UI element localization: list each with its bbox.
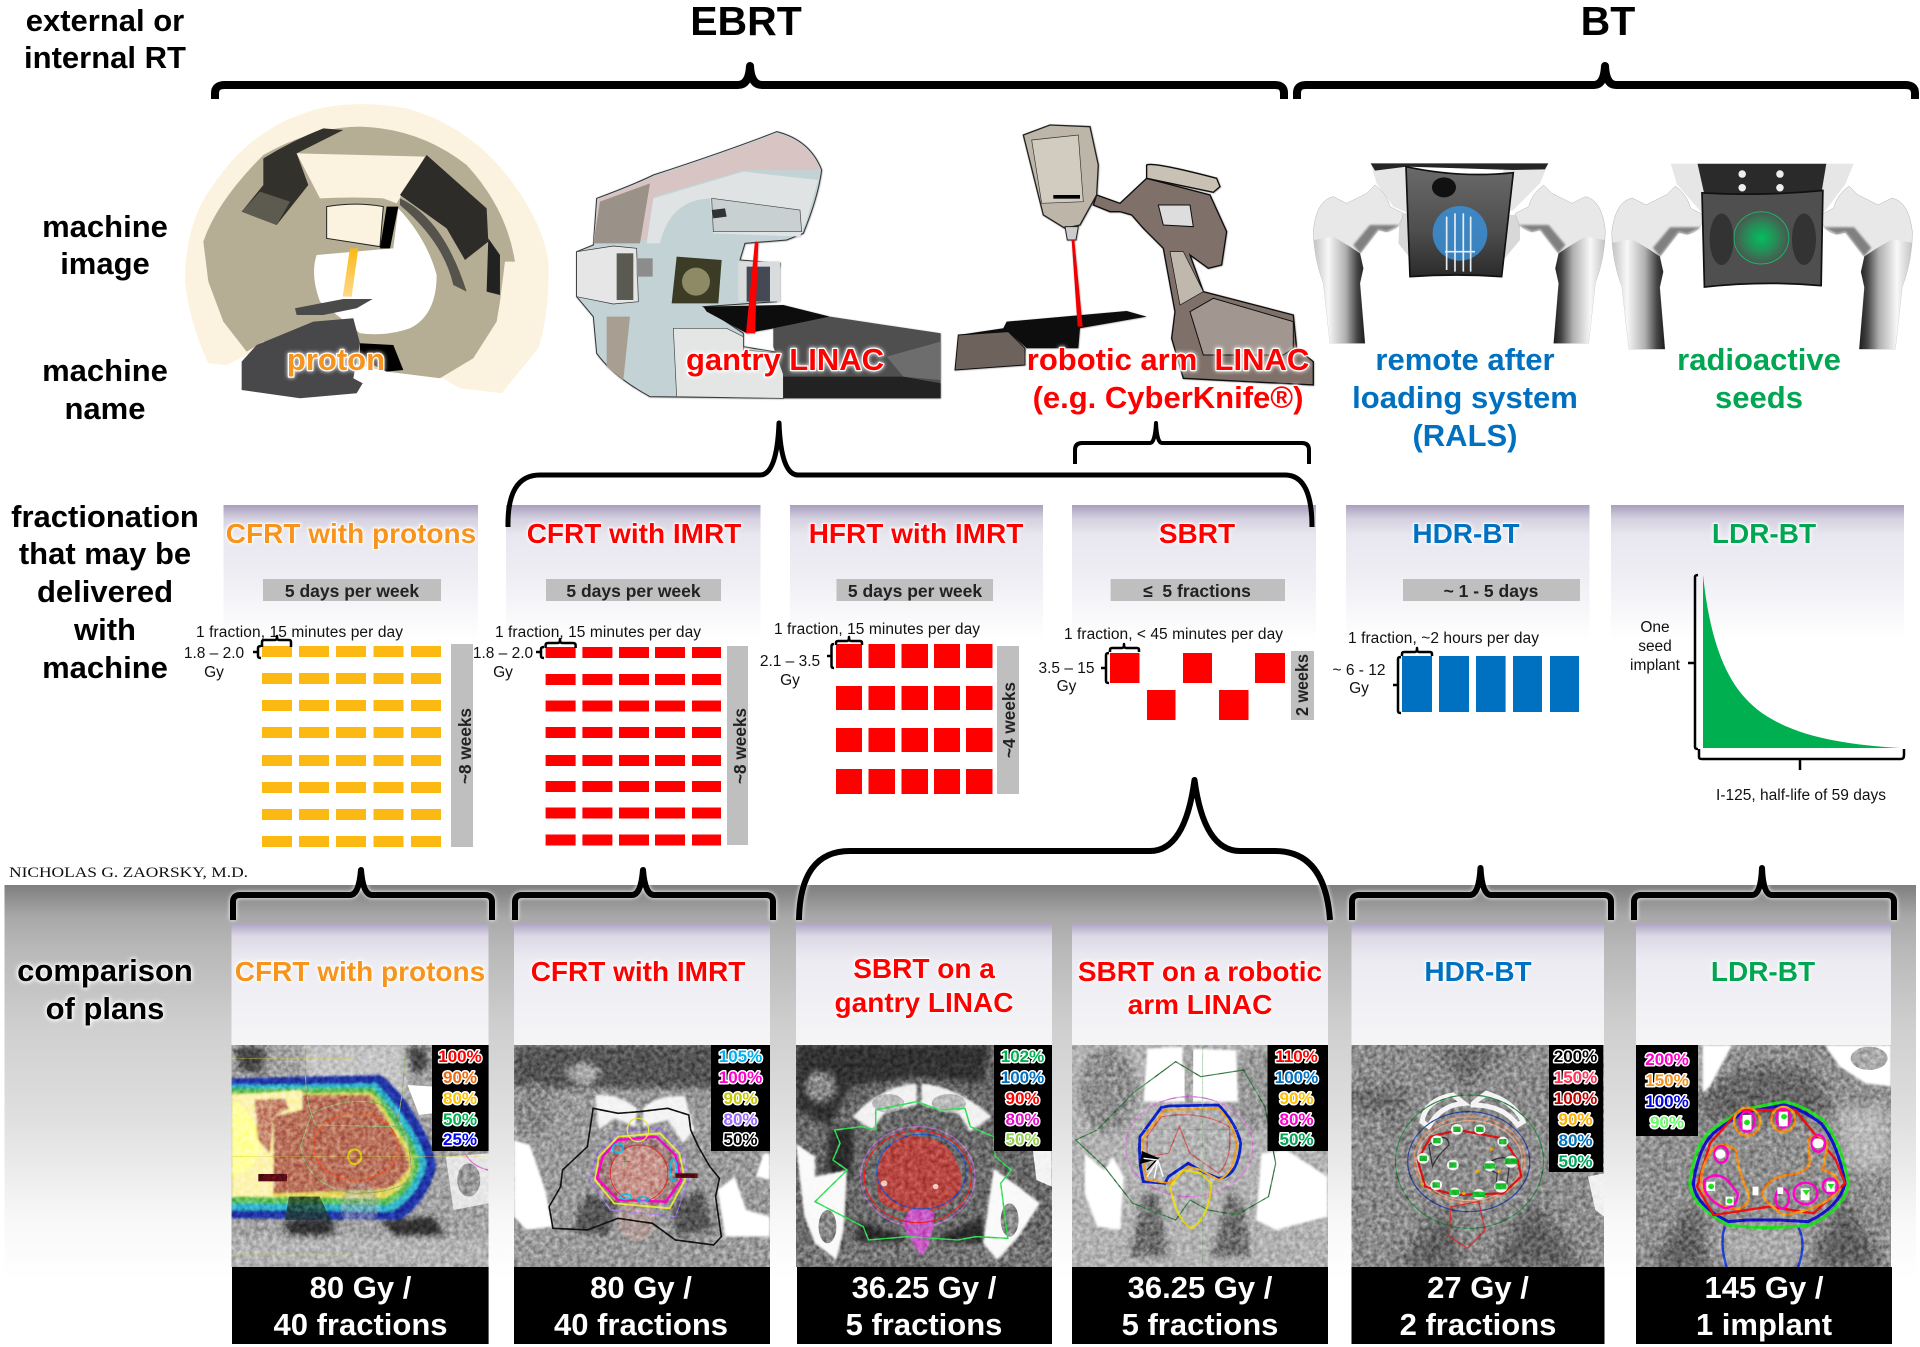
duration label: ~8 weeks <box>730 708 750 784</box>
duration label: ~4 weeks <box>999 682 1019 758</box>
dose legend: 105% <box>719 1047 762 1066</box>
panel title: SBRT <box>1159 518 1235 549</box>
duration label: ~8 weeks <box>455 708 475 784</box>
dose legend: 100% <box>1275 1068 1318 1087</box>
plan title: arm LINAC <box>1128 989 1272 1020</box>
CT dose image <box>1072 1045 1329 1268</box>
plan panel: CFRT with protons <box>231 924 492 1344</box>
dose legend: 80% <box>443 1089 477 1108</box>
row label: machine image: machine <box>42 209 168 244</box>
schedule label: 5 days per week <box>285 581 419 601</box>
plan title: CFRT with protons <box>235 956 485 987</box>
dose legend: 100% <box>719 1068 762 1087</box>
bracket: CFRT IMRT plan <box>515 870 773 920</box>
prescription: 40 fractions <box>273 1307 448 1342</box>
panel title: CFRT with protons <box>226 518 476 549</box>
prescription: 2 fractions <box>1400 1307 1556 1342</box>
plan title: CFRT with IMRT <box>531 956 745 987</box>
row label: fractionation that may be delivered with machine: that may be <box>19 536 191 571</box>
CT dose image <box>514 1045 774 1268</box>
schedule label: ≤ 5 fractions <box>1143 581 1251 601</box>
schedule label: ~ 1 - 5 days <box>1444 581 1539 601</box>
dose label: Gy <box>1057 678 1077 695</box>
panel title: LDR-BT <box>1712 518 1816 549</box>
row label: external or internal RT: internal RT <box>24 40 186 75</box>
bracket: LDR-BT plan <box>1634 868 1894 920</box>
panel: SBRT fractionation <box>1038 505 1316 720</box>
dose label: Gy <box>1349 680 1369 697</box>
fraction note: 1 fraction, 15 minutes per day <box>196 624 403 641</box>
row label: comparison of plans: of plans <box>46 991 164 1026</box>
row label: fractionation that may be delivered with machine: delivered <box>37 574 173 609</box>
plan panel: SBRT on a gantry LINAC <box>796 924 1053 1344</box>
prescription: 80 Gy / <box>590 1270 692 1305</box>
dose legend: 110% <box>1275 1047 1318 1066</box>
prescription: 27 Gy / <box>1427 1270 1529 1305</box>
dose legend: 200% <box>1645 1050 1689 1069</box>
plan panel: LDR-BT <box>1636 924 1895 1344</box>
label: one seed implant: implant <box>1630 657 1681 674</box>
machine name: robotic arm LINAC: (e.g. CyberKnife®) <box>1033 380 1303 415</box>
CT dose image <box>1351 1045 1606 1268</box>
dose legend: 90% <box>723 1089 758 1108</box>
plan panel: HDR-BT <box>1351 924 1606 1344</box>
row label: fractionation that may be delivered with machine: fractionation <box>11 499 199 534</box>
bracket: EBRT <box>215 66 1284 99</box>
dose label: 3.5 – 15 <box>1038 660 1095 677</box>
dose legend <box>1268 1045 1328 1151</box>
CT dose image <box>796 1045 1053 1268</box>
author credit: NICHOLAS G. ZAORSKY, M.D. <box>9 865 248 881</box>
dose legend: 100% <box>1554 1089 1597 1108</box>
dose legend: 90% <box>443 1068 477 1087</box>
prescription: 5 fractions <box>846 1307 1002 1342</box>
prescription: 80 Gy / <box>310 1270 412 1305</box>
dose label: Gy <box>204 664 224 681</box>
plan panel: SBRT on a robotic arm LINAC <box>1072 924 1329 1344</box>
plan title: LDR-BT <box>1711 956 1815 987</box>
duration label: 2 weeks <box>1292 654 1312 716</box>
image: radioactive seeds pelvis <box>1612 164 1912 349</box>
prescription: 36.25 Gy / <box>852 1270 997 1305</box>
label: one seed implant: seed <box>1638 638 1672 655</box>
dose legend: 90% <box>1558 1110 1593 1129</box>
bracket: CFRT protons plan <box>233 870 492 920</box>
row label: fractionation that may be delivered with machine: with <box>73 612 136 647</box>
bracket: HDR-BT plan <box>1352 868 1611 920</box>
row label: comparison of plans: comparison <box>17 953 193 988</box>
CT dose image <box>1636 1045 1895 1268</box>
label: one seed implant: One <box>1640 619 1670 636</box>
image: robotic arm LINAC <box>955 125 1313 385</box>
dose legend: 150% <box>1645 1071 1689 1090</box>
panel: HDR-BT fractionation <box>1332 505 1590 713</box>
dose label: ~ 6 - 12 <box>1332 662 1386 679</box>
fraction grid <box>1110 653 1285 720</box>
panel: CFRT with protons fractionation <box>184 505 478 847</box>
image: proton gantry <box>185 104 549 398</box>
row label: machine name: machine <box>42 353 168 388</box>
fraction note: 1 fraction, 15 minutes per day <box>495 624 701 641</box>
dose legend: 80% <box>1558 1131 1593 1150</box>
panel: HFRT with IMRT fractionation <box>760 505 1043 794</box>
panel: CFRT with IMRT fractionation <box>473 505 760 846</box>
image: remote afterloading pelvis <box>1313 163 1605 343</box>
prescription: 40 fractions <box>554 1307 728 1342</box>
dose legend: 50% <box>1005 1130 1040 1149</box>
fraction grid <box>262 646 441 847</box>
machine name: robotic arm LINAC: robotic arm LINAC <box>1027 342 1309 377</box>
row label: external or internal RT: external or <box>26 3 184 38</box>
dose legend: 50% <box>1558 1152 1593 1171</box>
dose legend: 25% <box>443 1130 477 1149</box>
plan title: gantry LINAC <box>835 987 1013 1018</box>
dose legend: 200% <box>1554 1047 1597 1066</box>
label: half-life: I-125, half-life of 59 days <box>1716 787 1886 804</box>
row label: fractionation that may be delivered with machine: machine <box>42 650 168 685</box>
machine name: remote after loading system: remote after <box>1375 342 1555 377</box>
plan title: HDR-BT <box>1424 956 1532 987</box>
machine name: remote after loading system: loading system <box>1352 380 1578 415</box>
bracket: BT <box>1297 66 1915 99</box>
plan title: SBRT on a robotic <box>1078 956 1322 987</box>
image: gantry LINAC <box>577 132 941 398</box>
bracket: robotic LINAC fractionation <box>1075 423 1309 464</box>
panel: LDR-BT fractionation <box>1611 505 1904 804</box>
dose label: Gy <box>780 672 800 689</box>
machine name: radioactive seeds: radioactive <box>1677 342 1841 377</box>
dose legend: 90% <box>1279 1089 1314 1108</box>
fraction note: 1 fraction, < 45 minutes per day <box>1064 626 1283 643</box>
schedule label: 5 days per week <box>848 581 982 601</box>
dose legend <box>1636 1045 1698 1136</box>
dose label: Gy <box>493 664 513 681</box>
dose label: 1.8 – 2.0 <box>473 645 534 662</box>
fraction note: 1 fraction, ~2 hours per day <box>1348 630 1539 647</box>
dose label: 2.1 – 3.5 <box>760 653 820 670</box>
bracket: gantry LINAC fractionation <box>508 423 1312 527</box>
dose label: 1.8 – 2.0 <box>184 645 245 662</box>
plan title: SBRT on a <box>853 953 995 984</box>
machine name: gantry LINAC: gantry LINAC <box>686 342 884 377</box>
prescription: 1 implant <box>1696 1307 1832 1342</box>
row label: machine name: name <box>65 391 145 426</box>
dose legend: 100% <box>1001 1068 1044 1087</box>
fraction bars <box>1402 656 1579 712</box>
chart: seed decay curve <box>1703 575 1900 748</box>
machine name: radioactive seeds: seeds <box>1715 380 1803 415</box>
fraction grid <box>836 644 992 794</box>
dose legend <box>711 1045 770 1151</box>
panel title: CFRT with IMRT <box>527 518 741 549</box>
dose legend: 102% <box>1001 1047 1044 1066</box>
plan panel: CFRT with IMRT <box>514 924 774 1344</box>
dose legend: 100% <box>438 1047 482 1066</box>
fraction note: 1 fraction, 15 minutes per day <box>774 621 980 638</box>
dose legend <box>994 1045 1052 1151</box>
dose legend <box>432 1045 489 1151</box>
prescription: 36.25 Gy / <box>1128 1270 1273 1305</box>
dose legend: 80% <box>1005 1110 1040 1129</box>
background band: comparison of plans <box>4 885 1916 1280</box>
dose legend: 50% <box>1279 1130 1314 1149</box>
dose legend: 90% <box>1650 1113 1684 1132</box>
dose legend: 50% <box>723 1130 758 1149</box>
machine name: remote after loading system: (RALS) <box>1412 418 1518 453</box>
dose legend: 80% <box>723 1110 758 1129</box>
dose legend: 50% <box>443 1110 477 1129</box>
panel title: HFRT with IMRT <box>809 518 1023 549</box>
fraction grid <box>546 647 721 846</box>
panel title: HDR-BT <box>1412 518 1520 549</box>
row label: machine image: image <box>60 246 150 281</box>
prescription: 145 Gy / <box>1705 1270 1824 1305</box>
prescription: 5 fractions <box>1122 1307 1278 1342</box>
machine name: proton: proton <box>287 342 385 377</box>
dose legend: 90% <box>1005 1089 1040 1108</box>
schedule label: 5 days per week <box>566 581 701 601</box>
dose legend: 150% <box>1554 1068 1597 1087</box>
dose legend: 100% <box>1645 1092 1689 1111</box>
bracket: SBRT plans <box>799 780 1330 920</box>
CT dose image <box>231 1045 492 1268</box>
dose legend: 80% <box>1279 1110 1314 1129</box>
dose legend <box>1549 1045 1603 1172</box>
